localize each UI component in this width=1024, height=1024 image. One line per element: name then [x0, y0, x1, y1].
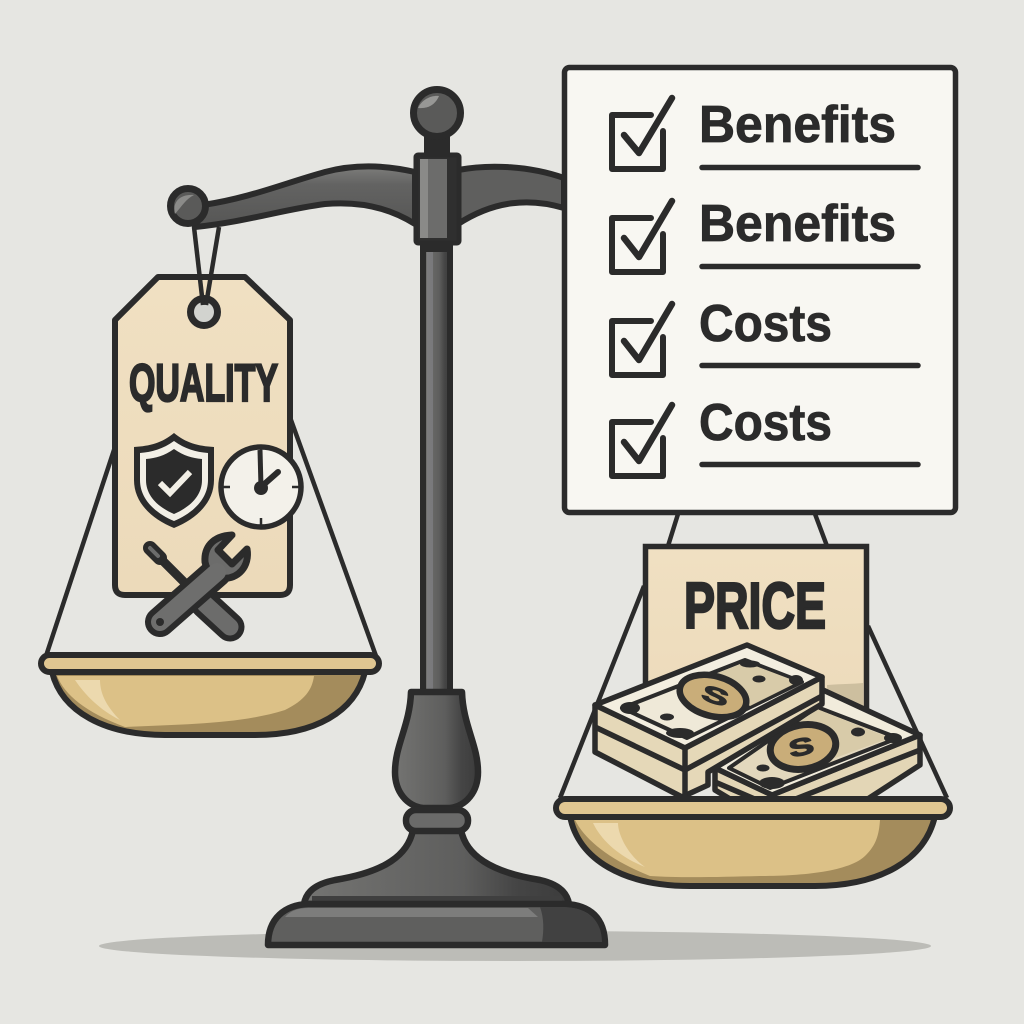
- right pan ropes: [560, 514, 947, 798]
- row 4: Costs: [699, 394, 832, 452]
- plate shade: [540, 907, 602, 942]
- quality label: QUALITY: [129, 354, 278, 413]
- left pan ropes: [46, 420, 376, 656]
- plate: [268, 904, 605, 945]
- row 4: [612, 394, 918, 476]
- price card: [646, 546, 866, 736]
- beam right arm: [458, 167, 564, 224]
- base: [268, 692, 605, 945]
- center post: [423, 240, 450, 695]
- panel body: [564, 68, 956, 512]
- checklist panel: [564, 68, 956, 512]
- hanging loop: [194, 227, 219, 305]
- beam left arm: [195, 166, 415, 227]
- row 1: Benefits: [699, 96, 896, 154]
- card body: [646, 546, 866, 736]
- row 1: [612, 96, 918, 169]
- right pan: [556, 799, 950, 886]
- tag body: [115, 277, 290, 595]
- price label: PRICE: [684, 569, 826, 642]
- screwdriver: [150, 548, 230, 627]
- flared foot: [304, 830, 569, 904]
- quality tag: [115, 227, 301, 627]
- plate highlight: [285, 908, 538, 917]
- row 3: Costs: [699, 295, 832, 353]
- collar: [416, 155, 459, 243]
- left knob: [170, 188, 206, 224]
- row 2: Benefits: [699, 195, 896, 253]
- row 3: [612, 295, 918, 375]
- tag eyelet: [190, 298, 218, 326]
- lower stack: [715, 690, 920, 802]
- icon: shield: [134, 433, 214, 528]
- money stacks: [595, 645, 920, 802]
- wrench: [156, 535, 247, 626]
- foot shadow band: [312, 896, 562, 902]
- upper stack: S: [699, 679, 732, 712]
- card shadow: [827, 683, 863, 712]
- ring: [406, 810, 468, 831]
- ground shadow: [99, 931, 931, 961]
- lower stack: S: [786, 732, 816, 763]
- icon: clock: [221, 447, 301, 527]
- icon: tools: [150, 535, 247, 627]
- top knob: [414, 90, 460, 156]
- left pan: [41, 655, 379, 735]
- vase: [395, 692, 478, 808]
- upper stack: [595, 645, 822, 797]
- row 2: [612, 195, 918, 272]
